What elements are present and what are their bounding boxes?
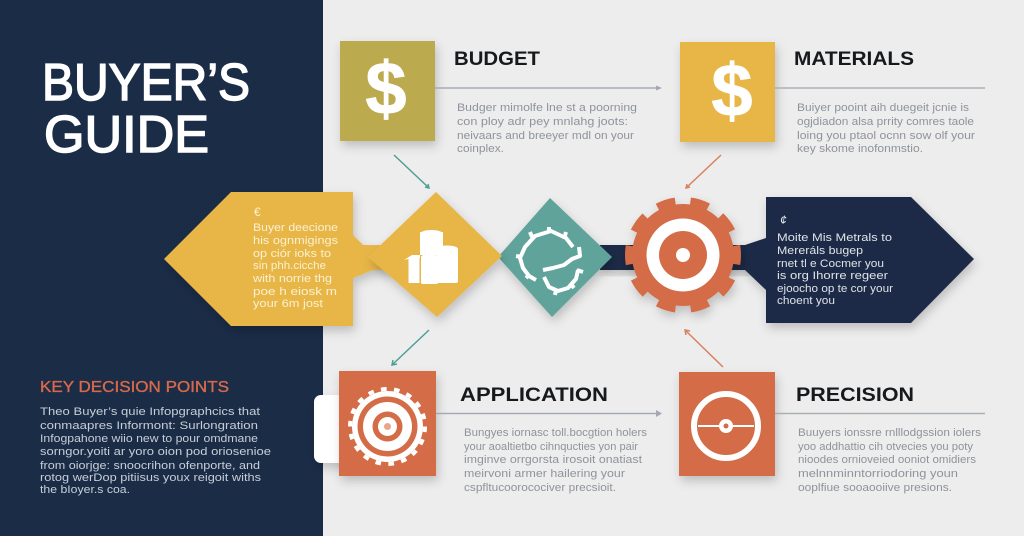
icon: materials dollar square — [680, 42, 775, 142]
title: GUIDE — [44, 106, 209, 164]
icon: teal diamond with broken gear — [498, 198, 612, 317]
icon: precision target square — [679, 372, 775, 476]
text block: application copy — [464, 427, 648, 494]
text block: navy callout copy: ejoocho op te cor your — [777, 283, 893, 295]
text block: budget copy: con ploy adr pey mnlahg joots: — [457, 116, 628, 128]
text block: budget copy: neivaars and breeyer mdl on your — [457, 130, 634, 142]
text block: sidebar description: the bIoyer.s coa. — [40, 484, 130, 496]
icon: materials dollar square: $ — [711, 49, 753, 132]
text block: materials copy: Buiyer pooint aih duegeit jcnie is — [797, 102, 970, 114]
text block: navy callout copy — [777, 232, 893, 307]
text block: yellow callout copy: sin phh.cicche — [253, 260, 326, 272]
arrow: hub to application — [392, 330, 429, 365]
text block: precision copy: yoo addhattio cih otvecies you poty — [798, 441, 973, 453]
icon: application gear square — [339, 371, 436, 476]
text block: application copy: Bungyes iornasc toll.bocgtion holers — [464, 427, 648, 439]
panel: budget — [340, 41, 662, 155]
divider: precision rule — [775, 413, 985, 414]
text block: yellow callout copy: your 6m jost — [253, 298, 323, 310]
text block: precision copy: Buuyers ionssre rnlllodgssion iolers — [798, 427, 982, 439]
text block: budget copy — [457, 102, 637, 155]
text block: yellow callout copy: with norrie thg — [252, 273, 332, 285]
text block: navy callout copy: choent you — [777, 295, 835, 307]
text block: navy callout copy: Mereráls bugep — [777, 245, 863, 257]
text block: precision copy — [798, 427, 982, 494]
text block: application copy: your aoaltietbo cihnqucties yon pair — [464, 441, 638, 453]
text block: navy callout copy: is org Ihorre regeer — [777, 270, 888, 282]
panel: navy pentagon callout — [745, 197, 974, 323]
title — [42, 54, 250, 164]
icon: budget dollar square: $ — [365, 47, 407, 130]
panel: navy sidebar — [0, 0, 323, 536]
heading: materials: MATERIALS — [794, 48, 914, 70]
icon: small currency glyph: ¢ — [780, 213, 787, 227]
icon: yellow diamond with cylinders — [368, 192, 502, 317]
text block: yellow callout copy — [252, 222, 339, 310]
panel: application — [339, 371, 662, 494]
arrow: materials to hub — [686, 155, 721, 188]
text block: sidebar description: Infogpahone wiio new to pour omdmane — [40, 433, 258, 445]
text block: materials copy: loing you ptaol ocnn sow olf your — [797, 130, 975, 142]
panel: yellow pentagon callout — [164, 192, 390, 326]
text block: budget copy: coinplex. — [457, 143, 504, 155]
title: BUYER’S — [42, 54, 250, 112]
text block: materials copy — [797, 102, 975, 155]
navy connector band — [600, 245, 770, 270]
text block: application copy: imginve orrgorsta irosoit onatiast — [464, 454, 642, 466]
text block: precision copy: nioodes ornioveied ooniot omidiers — [798, 454, 977, 466]
heading: budget: BUDGET — [454, 48, 540, 70]
panel: precision — [679, 372, 985, 494]
arrow: hub to precision — [685, 330, 723, 367]
arrow: budget to hub — [394, 155, 429, 188]
text block: application copy: meirvoni armer hailering your — [464, 468, 625, 480]
icon: small currency glyph: € — [254, 205, 261, 219]
panel: materials — [680, 42, 985, 155]
text block: materials copy: key skome inofonmstio. — [797, 143, 923, 155]
white tab — [314, 395, 364, 463]
text block: sidebar description: sorngor.yoiti ar yoro oion pod oriosenioe — [40, 446, 271, 458]
text block: sidebar description — [40, 406, 271, 496]
text block: navy callout copy: Moite Mis Metrals to — [777, 232, 892, 244]
text block: yellow callout copy: Buyer deecione — [253, 222, 338, 234]
icon: budget dollar square — [340, 41, 435, 141]
text block: sidebar description: rotog werDop pitiisus youx reigoit withs — [40, 472, 262, 484]
text block: precision copy: melnnminntorriodoring youn — [798, 468, 958, 480]
text block: application copy: cspfltucoorocociver precsioit. — [464, 482, 616, 494]
text block: sidebar description: conmaapres Informont: Surlongration — [40, 420, 258, 432]
heading: precision: PRECISION — [796, 384, 914, 406]
text block: yellow callout copy: op ciór ioks to — [253, 248, 331, 260]
text block: yellow callout copy: poe h eiosk m — [253, 286, 337, 298]
heading: key decision points: KEY DECISION POINTS — [40, 379, 229, 396]
icon: orange target gear — [629, 201, 737, 309]
arrow: application rule — [436, 410, 662, 417]
divider: materials rule — [775, 87, 985, 89]
text block: budget copy: Budger mimolfe lne st a poorning — [457, 102, 637, 114]
text block: sidebar description: from oiorjge: snoocrihon ofenporte, and — [40, 460, 260, 472]
arrow: budget rule — [435, 86, 662, 90]
heading: application: APPLICATION — [460, 384, 608, 406]
text block: precision copy: ooplfiue sooaooiive presions. — [798, 482, 952, 494]
text block: materials copy: ogjdiadon alsa prrity comres taole — [797, 116, 974, 128]
text block: yellow callout copy: his ognmigings — [253, 235, 339, 247]
text block: navy callout copy: rnet tl e Cocmer you — [777, 258, 884, 270]
text block: sidebar description: Theo Buyer’s quie Infopgraphcics that — [40, 406, 260, 418]
